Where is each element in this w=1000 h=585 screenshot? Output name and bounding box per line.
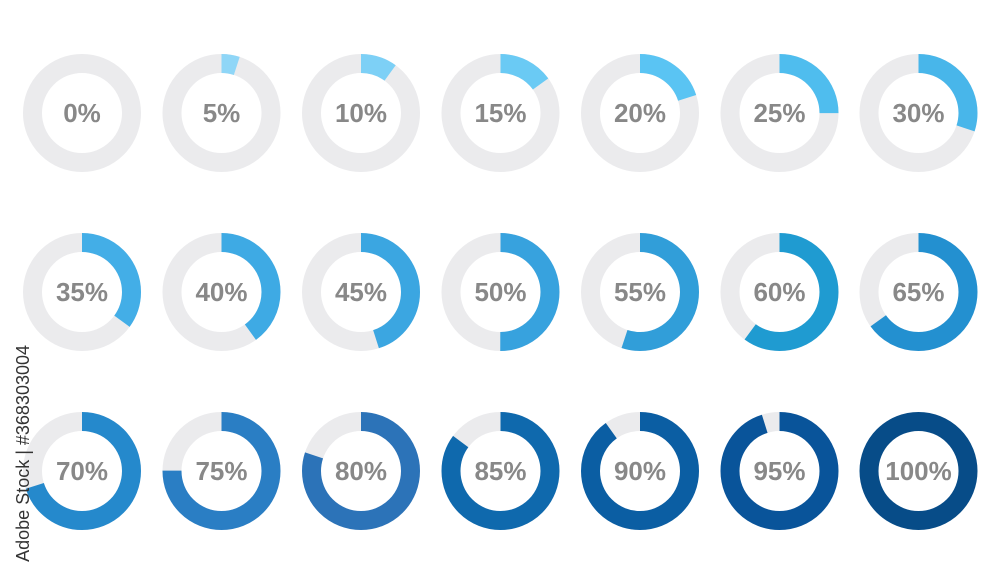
donut 30%: 30% <box>892 98 945 128</box>
donut 80%: 80% <box>335 456 387 486</box>
donut 30% <box>869 64 968 162</box>
donut 90% <box>590 422 690 520</box>
donut 50%: 50% <box>474 277 527 307</box>
donut 100% <box>869 422 968 520</box>
donut 15% <box>451 64 550 162</box>
donut 70%: 70% <box>56 456 108 486</box>
donut 75% <box>172 422 271 520</box>
donut 75%: 75% <box>195 456 248 486</box>
donut 95% <box>730 422 829 520</box>
donut 5%: 5% <box>203 98 240 128</box>
vertical stock id: Adobe Stock | #368303004 <box>13 345 33 562</box>
donut 85% <box>451 422 550 520</box>
donut 5% <box>172 64 271 162</box>
donut 95%: 95% <box>753 456 806 486</box>
donut 0%: 0% <box>63 98 101 128</box>
donut 20%: 20% <box>614 98 666 128</box>
donut 10% <box>312 64 410 162</box>
donut 45% <box>312 242 410 342</box>
donut 70% <box>32 422 132 520</box>
donut 85%: 85% <box>474 456 527 486</box>
donut 40%: 40% <box>195 277 248 307</box>
donut 80% <box>312 422 410 520</box>
donut 65% <box>869 242 968 342</box>
donut 35% <box>32 242 132 342</box>
donut 0% <box>32 64 132 162</box>
donut 55% <box>590 242 690 342</box>
donut 100%: 100% <box>885 456 952 486</box>
donut 60% <box>730 242 829 342</box>
donut 90%: 90% <box>614 456 666 486</box>
donut 20% <box>590 64 690 162</box>
donut 50% <box>451 242 550 342</box>
donut 15%: 15% <box>474 98 527 128</box>
donut 10%: 10% <box>335 98 387 128</box>
donut 35%: 35% <box>56 277 108 307</box>
donut 60%: 60% <box>753 277 806 307</box>
donut 65%: 65% <box>892 277 945 307</box>
donut 55%: 55% <box>614 277 666 307</box>
donut 45%: 45% <box>335 277 387 307</box>
donut 25%: 25% <box>753 98 806 128</box>
donut 25% <box>730 64 829 162</box>
donut 40% <box>172 242 271 342</box>
